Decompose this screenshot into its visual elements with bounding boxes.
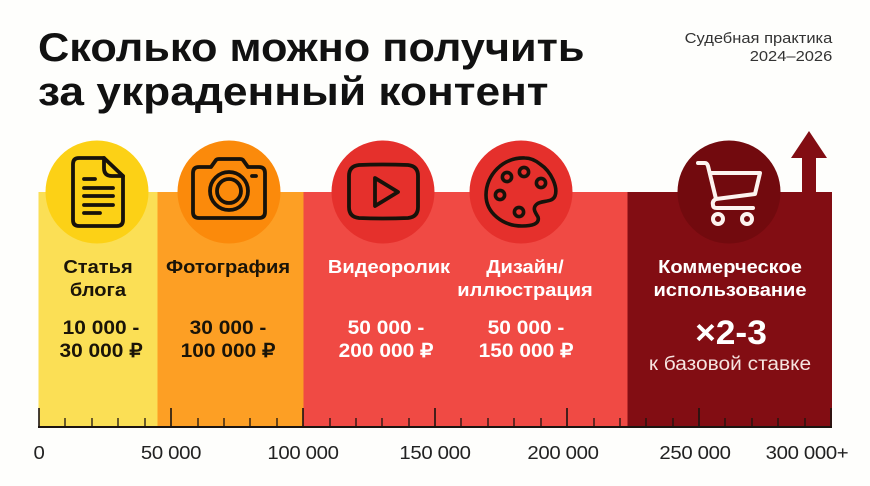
- axis labels: 150 000: [399, 443, 471, 463]
- axis: [38, 408, 832, 427]
- value: blog article: [59, 318, 143, 362]
- value: photo: 100 000 ₽: [181, 341, 275, 362]
- axis labels: 200 000: [527, 443, 599, 463]
- value: video: 50 000 -: [348, 318, 424, 339]
- value: design: [479, 318, 573, 362]
- value: blog article: 30 000 ₽: [59, 341, 143, 362]
- text: commercial use: использование: [653, 280, 807, 300]
- title: Сколько можно получить: [38, 26, 584, 70]
- value: blog article: 10 000 -: [63, 318, 139, 339]
- icon: document: [46, 140, 148, 244]
- text: blog article: [63, 257, 133, 300]
- text: commercial use: Коммерческое: [658, 257, 802, 277]
- band: dark red: [628, 192, 832, 428]
- band: orange: [158, 192, 304, 428]
- source note: Судебная практика: [684, 30, 832, 47]
- arrow up: [791, 131, 827, 192]
- title: за украденный контент: [38, 70, 548, 114]
- icon: palette: [470, 140, 572, 244]
- text: commercial use: [653, 257, 807, 300]
- text: blog article: блога: [70, 280, 126, 300]
- axis labels: 250 000: [659, 443, 731, 463]
- title: [38, 26, 584, 114]
- value: design: 50 000 -: [488, 318, 564, 339]
- icon: cart: [678, 140, 780, 244]
- text: video: Видеоролик: [328, 257, 450, 277]
- value: photo: 30 000 -: [190, 318, 266, 339]
- axis labels: 100 000: [267, 443, 339, 463]
- multiplier: ×2-3: [695, 314, 767, 352]
- icon: video: [332, 140, 434, 244]
- source note: 2024–2026: [749, 48, 832, 65]
- value: video: 200 000 ₽: [339, 341, 433, 362]
- value: video: [339, 318, 433, 362]
- axis labels: 0: [34, 443, 44, 463]
- band: red: [304, 192, 628, 428]
- source note: [684, 30, 832, 65]
- multiplier note: к базовой ставке: [649, 354, 811, 375]
- value: design: 150 000 ₽: [479, 341, 573, 362]
- value: photo: [181, 318, 275, 362]
- text: design: Дизайн/: [486, 257, 564, 277]
- axis labels: 300 000+: [766, 443, 848, 463]
- icon: camera: [178, 140, 280, 244]
- axis labels: 50 000: [141, 443, 201, 463]
- text: design: [457, 257, 593, 300]
- text: design: иллюстрация: [457, 280, 593, 300]
- text: blog article: Статья: [63, 257, 133, 277]
- text: photo: Фотография: [166, 257, 290, 277]
- band: yellow: [38, 192, 158, 428]
